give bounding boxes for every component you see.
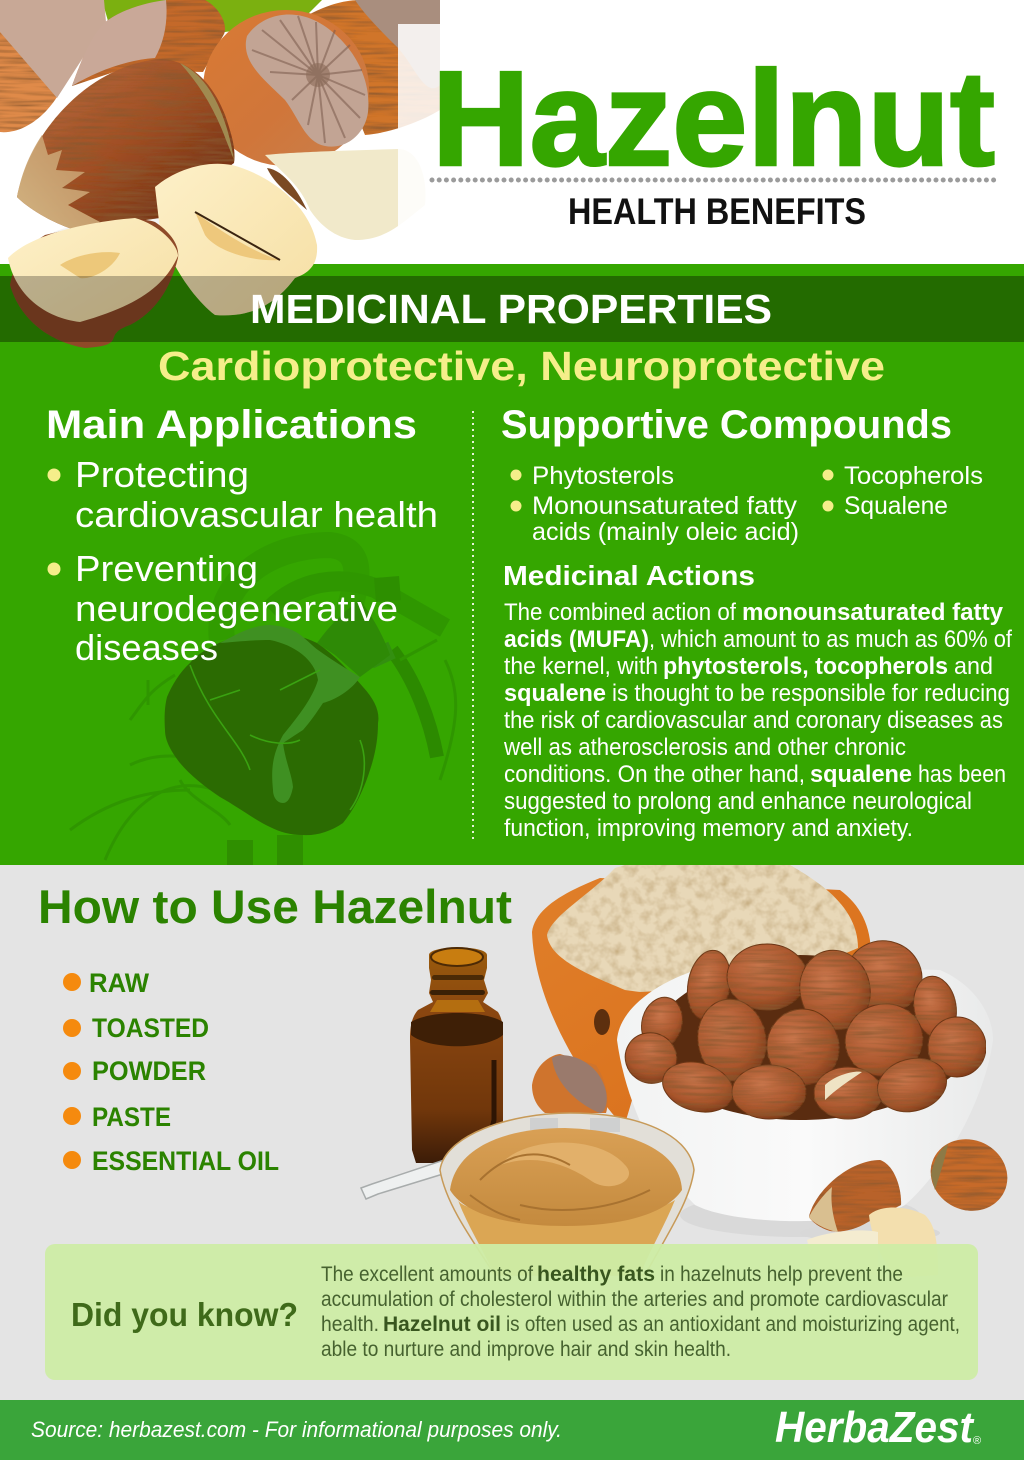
footer <box>0 1400 1024 1460</box>
column: supportive compounds <box>501 403 1012 842</box>
heading: supportive compounds: Supportive Compounds <box>501 403 952 447</box>
item: protecting cardiovascular health <box>75 454 438 535</box>
did you know heading: Did you know? <box>71 1296 298 1333</box>
item: preventing neurodegenerative diseases <box>75 548 398 668</box>
heading: how to use hazelnut: How to Use Hazelnut <box>38 880 512 933</box>
hero image: hazelnuts <box>0 0 440 348</box>
medicinal actions paragraph: The combined action of <box>504 599 736 626</box>
heart illustration <box>70 545 456 865</box>
did you know text: Hazelnut oil <box>383 1313 501 1336</box>
usage list: TOASTED <box>92 1013 209 1043</box>
medicinal actions paragraph <box>503 599 1012 842</box>
bullet <box>48 468 60 482</box>
image: wooden bowl of hazelnut powder <box>532 865 871 1127</box>
medicinal actions paragraph: squalene <box>810 761 912 788</box>
usage list: POWDER <box>92 1056 206 1086</box>
did you know panel <box>45 1244 978 1380</box>
medicinal actions paragraph: the kernel, with <box>504 653 658 680</box>
medicinal actions paragraph: squalene <box>504 680 606 707</box>
medicinal actions paragraph: conditions. On the other hand, <box>504 761 805 788</box>
medicinal properties panel background <box>0 264 1024 865</box>
header background <box>0 0 1024 264</box>
did you know text: health. <box>321 1313 379 1336</box>
medicinal actions paragraph: suggested to prolong and enhance neurological <box>504 788 972 815</box>
usage list: RAW <box>89 968 149 998</box>
medicinal actions paragraph: acids (MUFA) <box>504 626 649 653</box>
medicinal actions paragraph: well as atherosclerosis and other chronic <box>503 734 906 761</box>
subheading: properties list: Cardioprotective, Neuroprotective <box>158 343 885 389</box>
subtitle: HEALTH BENEFITS <box>568 191 866 232</box>
heading: medicinal properties: MEDICINAL PROPERTIES <box>250 286 772 332</box>
how to use panel background <box>0 865 1024 1400</box>
compounds list: Phytosterols <box>532 462 674 490</box>
dotted title divider <box>432 178 995 182</box>
compounds list <box>510 462 983 546</box>
compounds list: Squalene <box>844 492 948 520</box>
image: amber essential oil bottle <box>410 948 503 1163</box>
usage list <box>63 968 279 1176</box>
dark heading band <box>0 276 1024 342</box>
medicinal actions paragraph: and <box>954 653 993 680</box>
heading: medicinal actions: Medicinal Actions <box>503 560 755 591</box>
compounds list: acids (mainly oleic acid) <box>532 518 799 546</box>
bullet <box>48 562 60 576</box>
dotted column divider <box>472 411 474 842</box>
image: glass dropper <box>361 1158 456 1199</box>
image: whole hazelnuts on table <box>800 1127 1019 1278</box>
image: bowl of hazelnut paste <box>440 1113 694 1275</box>
did you know text: in hazelnuts help prevent the <box>660 1263 903 1286</box>
usage list: PASTE <box>92 1102 171 1132</box>
did you know text: is often used as an antioxidant and moisturizing agent, <box>506 1313 960 1336</box>
hazelnut kernels <box>616 932 986 1119</box>
medicinal actions paragraph: phytosterols, tocopherols <box>663 653 948 680</box>
heading: main applications: Main Applications <box>46 403 417 447</box>
medicinal actions paragraph: has been <box>918 761 1006 788</box>
medicinal actions paragraph: monounsaturated fatty <box>742 599 1004 626</box>
medicinal actions paragraph: function, improving memory and anxiety. <box>504 815 913 842</box>
item: preventing neurodegenerative diseases: Preventing <box>75 548 258 589</box>
item: preventing neurodegenerative diseases: diseases <box>75 627 218 668</box>
image: white bowl of hazelnuts <box>616 932 993 1237</box>
item: preventing neurodegenerative diseases: neurodegenerative <box>75 588 398 629</box>
title: Hazelnut <box>432 43 995 194</box>
did you know text <box>321 1263 960 1361</box>
did you know text: able to nurture and improve hair and skin health. <box>321 1338 731 1361</box>
item: protecting cardiovascular health: cardiovascular health <box>75 494 438 535</box>
compounds list: Tocopherols <box>844 462 983 490</box>
column: main applications <box>46 403 438 668</box>
source note: Source: herbazest.com - For informational purposes only. <box>31 1417 562 1442</box>
did you know text: The excellent amounts of <box>321 1263 533 1286</box>
item: protecting cardiovascular health: Protecting <box>75 454 249 495</box>
logo: HerbaZest: HerbaZest <box>775 1403 975 1452</box>
compounds list: Monounsaturated fatty <box>532 492 798 520</box>
usage list: ESSENTIAL OIL <box>92 1146 279 1176</box>
did you know text: healthy fats <box>537 1263 655 1286</box>
logo: HerbaZest: ® <box>973 1435 981 1447</box>
image: small hazelnut <box>532 1054 608 1113</box>
did you know text: accumulation of cholesterol within the arteries and promote cardiovascular <box>321 1288 948 1311</box>
